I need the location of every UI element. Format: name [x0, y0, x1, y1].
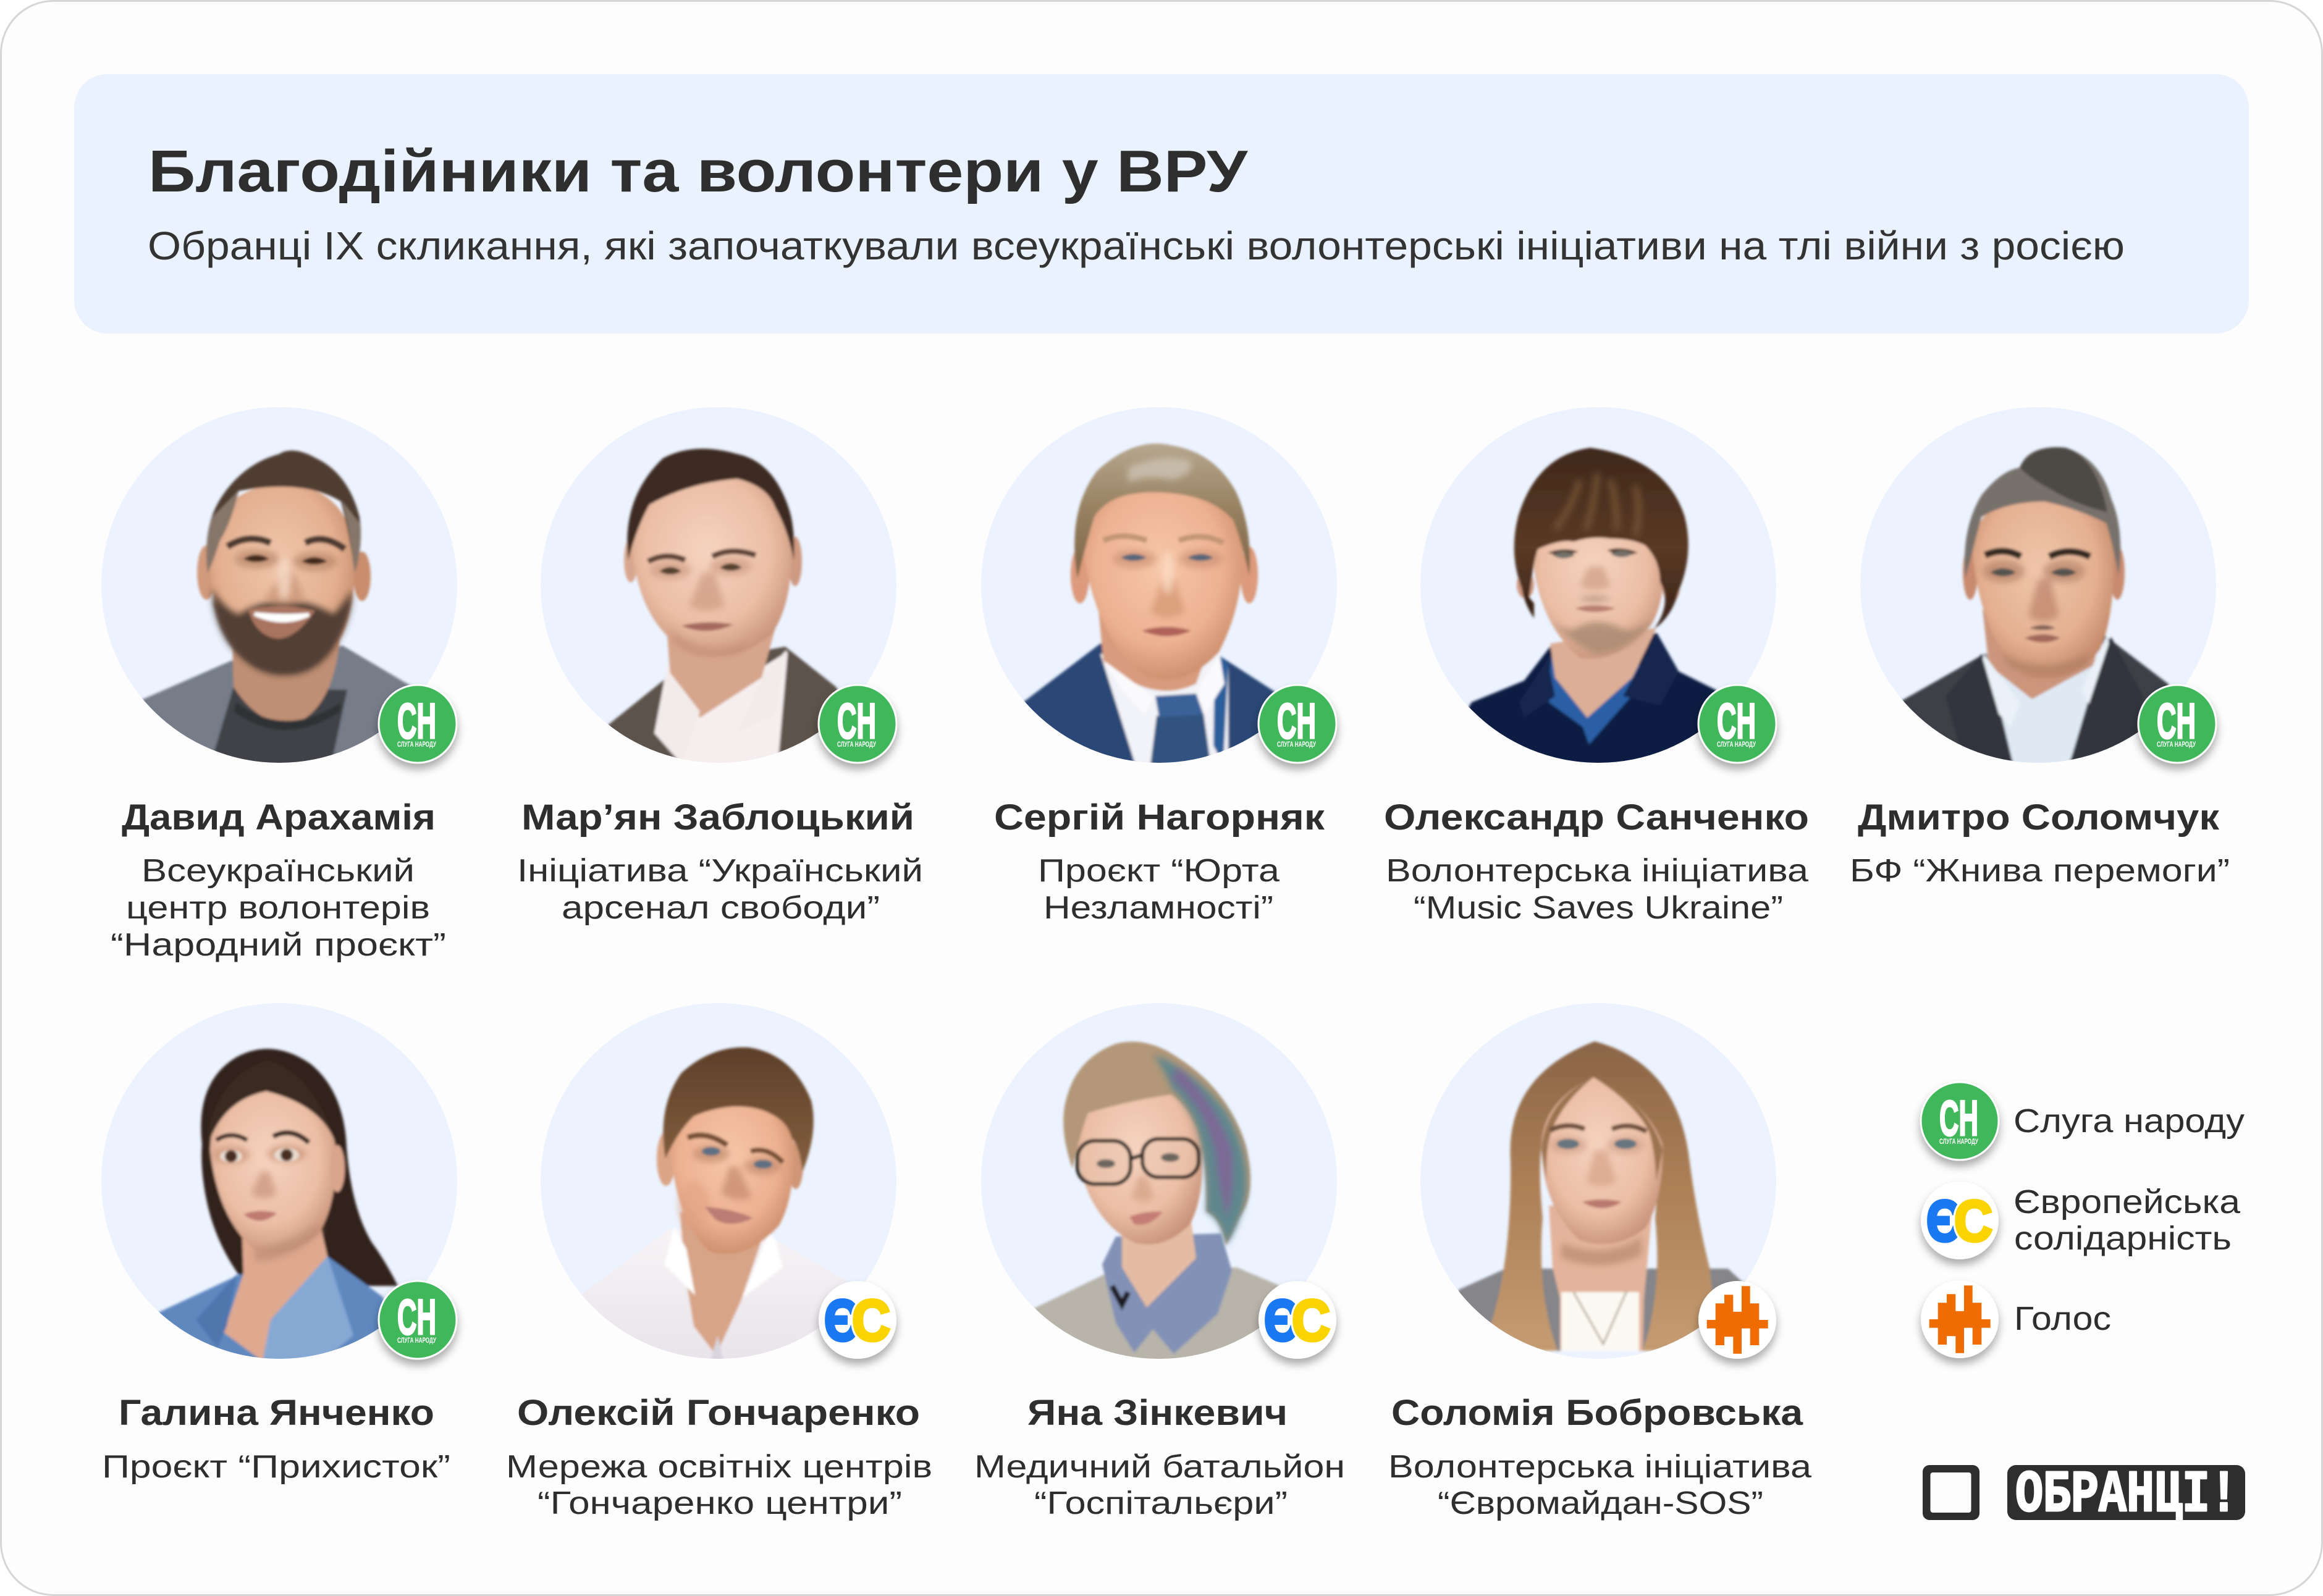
name and initiative: Давид Арахамія: Давид Арахамія [122, 797, 436, 838]
badge: Слуга народу (Арахамія): СН [397, 694, 436, 749]
badge: Слуга народу (Санченко): СН [1717, 694, 1756, 749]
badge: Слуга народу (Санченко): СЛУГА НАРОДУ [1717, 741, 1756, 749]
portrait: Мар’ян Заблоцький [541, 407, 896, 770]
badge: Європейська солідарність (Зінкевич) [1258, 1281, 1336, 1359]
name and initiative: Олексій Гончаренко: “Гончаренко центри” [538, 1485, 902, 1521]
legend item: Слуга народу: СЛУГА НАРОДУ [1939, 1138, 1979, 1146]
badge: Слуга народу (Нагорняк): СЛУГА НАРОДУ [1277, 741, 1317, 749]
name and initiative: Мар’ян Заблоцький: Ініціатива “Український [517, 853, 923, 889]
badge: Слуга народу (Заблоцький): СЛУГА НАРОДУ [837, 741, 877, 749]
name and initiative: Галина Янченко [102, 1393, 450, 1485]
name and initiative: Давид Арахамія [111, 797, 446, 963]
name and initiative: Галина Янченко: Галина Янченко [119, 1393, 434, 1433]
badge: Слуга народу (Нагорняк): СН [1277, 694, 1316, 749]
name and initiative: Яна Зінкевич: Медичний батальйон [974, 1449, 1345, 1485]
legend item: Голос: Голос [2014, 1300, 2111, 1337]
name and initiative: Давид Арахамія: Всеукраїнський [141, 853, 415, 889]
portrait: Олексій Гончаренко [539, 1003, 898, 1366]
portrait: Яна Зінкевич [981, 1003, 1337, 1366]
legend [1921, 1082, 2245, 1358]
badge: Слуга народу (Соломчук) [2138, 685, 2216, 763]
badge: Європейська солідарність (Зінкевич): С [1292, 1288, 1330, 1353]
badge: Слуга народу (Янченко): СЛУГА НАРОДУ [397, 1337, 437, 1345]
badge: Європейська солідарність (Зінкевич): Є [1264, 1288, 1299, 1353]
name and initiative: Мар’ян Заблоцький [517, 797, 923, 926]
badge: Слуга народу (Арахамія): СЛУГА НАРОДУ [397, 741, 437, 749]
name and initiative: Яна Зінкевич [974, 1393, 1345, 1521]
badge: Європейська солідарність (Гончаренко) [819, 1281, 896, 1359]
name and initiative: Соломія Бобровська [1388, 1393, 1811, 1521]
legend item: Європейська солідарність: С [1954, 1188, 1992, 1253]
badge: Слуга народу (Арахамія) [379, 685, 457, 763]
logo: Обранці [1923, 1461, 2245, 1529]
portrait: Соломія Бобровська [1420, 1003, 1776, 1359]
legend item: Європейська солідарність [1921, 1182, 2241, 1259]
name and initiative: Олександр Санченко: Олександр Санченко [1384, 797, 1809, 838]
badge: Європейська солідарність (Гончаренко): Є [824, 1288, 859, 1353]
badge: Слуга народу (Янченко) [379, 1281, 457, 1359]
portrait: Давид Арахамія [101, 407, 457, 770]
name and initiative: Олександр Санченко: “Music Saves Ukraine” [1414, 890, 1783, 926]
badge: Слуга народу (Соломчук): СЛУГА НАРОДУ [2157, 741, 2196, 749]
name and initiative: Дмитро Соломчук [1850, 797, 2230, 889]
title: Благодійники та волонтери у ВРУ [148, 138, 1248, 204]
name and initiative: Дмитро Соломчук: Дмитро Соломчук [1858, 797, 2220, 838]
name and initiative: Давид Арахамія: “Народний проєкт” [111, 927, 446, 963]
badge: Європейська солідарність (Гончаренко): С [852, 1288, 890, 1353]
name and initiative: Сергій Нагорняк [994, 797, 1325, 926]
name and initiative: Давид Арахамія: центр волонтерів [126, 890, 430, 926]
badge: Голос (Бобровська) [1698, 1281, 1776, 1359]
badge: Слуга народу (Санченко) [1698, 685, 1776, 763]
name and initiative: Мар’ян Заблоцький: арсенал свободи” [562, 890, 880, 926]
badge: Слуга народу (Заблоцький): СН [837, 694, 876, 749]
name and initiative: Олексій Гончаренко: Мережа освітніх центрів [506, 1449, 932, 1485]
badge: Європейська солідарність (Зінкевич): С [1292, 1288, 1330, 1353]
legend item: Слуга народу: Слуга народу [2013, 1102, 2245, 1140]
legend item: Європейська солідарність: солідарність [2014, 1220, 2232, 1257]
subtitle: Обранці ІХ скликання, які започаткували всеукраїнські волонтерські ініціативи на тлі війни з росією [148, 224, 2125, 268]
name and initiative: Олексій Гончаренко [506, 1393, 932, 1521]
name and initiative: Яна Зінкевич: “Госпітальєри” [1034, 1485, 1288, 1521]
badge: Слуга народу (Заблоцький) [819, 685, 896, 763]
badge: Європейська солідарність (Гончаренко): С [852, 1288, 890, 1353]
logo: Обранці: ОБРАНЦІ! [2015, 1461, 2238, 1529]
name and initiative: Сергій Нагорняк: Сергій Нагорняк [994, 797, 1325, 838]
portrait: Олександр Санченко [1420, 407, 1776, 770]
name and initiative: Сергій Нагорняк: Незламності” [1043, 890, 1273, 926]
name and initiative: Галина Янченко: Проєкт “Прихисток” [102, 1449, 450, 1485]
badge: Слуга народу (Соломчук): СН [2157, 694, 2196, 749]
portrait: Галина Янченко [101, 1003, 457, 1366]
legend item: Слуга народу [1921, 1082, 2245, 1160]
header panel [74, 74, 2249, 334]
legend item: Європейська солідарність: Є [1926, 1188, 1961, 1253]
name and initiative: Соломія Бобровська: Соломія Бобровська [1391, 1393, 1803, 1433]
badge: Слуга народу (Нагорняк) [1258, 685, 1336, 763]
name and initiative: Соломія Бобровська: “Євромайдан-SOS” [1438, 1485, 1763, 1521]
portrait: Дмитро Соломчук [1860, 407, 2216, 770]
name and initiative: Яна Зінкевич: Яна Зінкевич [1027, 1393, 1288, 1433]
legend item: Голос [1921, 1280, 2111, 1358]
name and initiative: Олексій Гончаренко: Олексій Гончаренко [517, 1393, 920, 1433]
name and initiative: Олександр Санченко [1384, 797, 1809, 926]
name and initiative: Сергій Нагорняк: Проєкт “Юрта [1038, 853, 1280, 889]
name and initiative: Олександр Санченко: Волонтерська ініціатива [1386, 853, 1808, 889]
name and initiative: Соломія Бобровська: Волонтерська ініціатива [1388, 1449, 1811, 1485]
portrait: Сергій Нагорняк [981, 407, 1337, 770]
name and initiative: Мар’ян Заблоцький: Мар’ян Заблоцький [521, 797, 914, 838]
badge: Слуга народу (Янченко): СН [397, 1290, 436, 1345]
legend item: Слуга народу: СН [1939, 1091, 1978, 1146]
name and initiative: Дмитро Соломчук: БФ “Жнива перемоги” [1850, 853, 2230, 889]
legend item: Європейська солідарність: С [1954, 1188, 1992, 1253]
legend item: Європейська солідарність: Європейська [2013, 1183, 2241, 1220]
